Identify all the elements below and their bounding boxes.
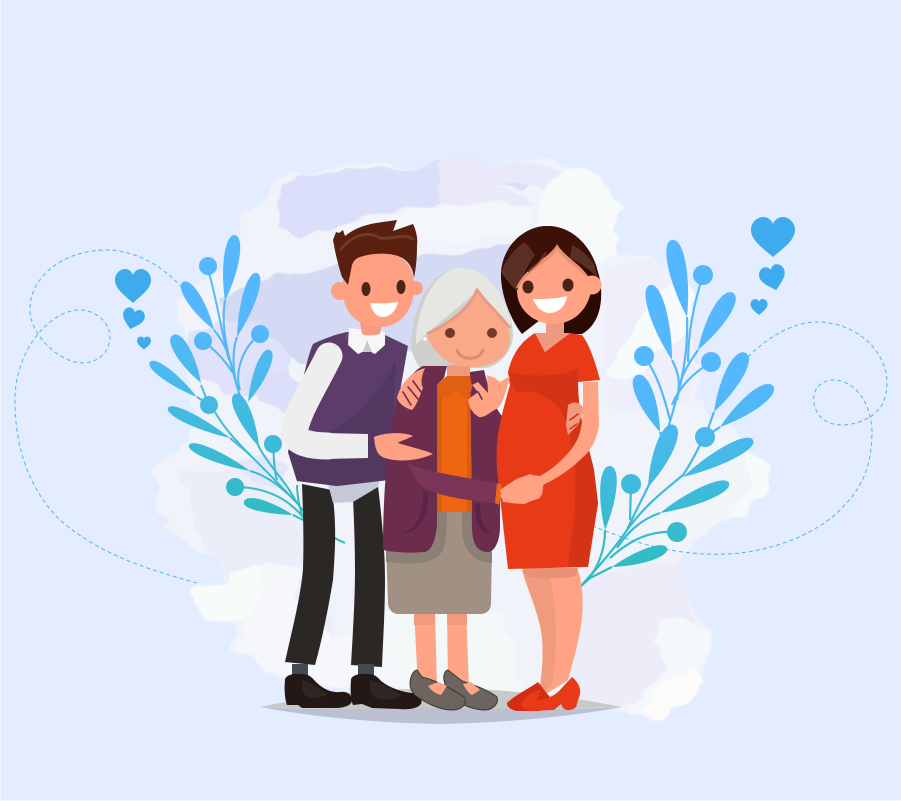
hair	[333, 220, 417, 285]
head	[343, 253, 414, 327]
legs	[414, 610, 469, 687]
socks	[292, 664, 308, 675]
right trouser leg	[351, 486, 385, 667]
leaf	[666, 240, 688, 317]
dress	[497, 333, 600, 569]
smile	[370, 302, 398, 317]
man's hand	[374, 433, 433, 461]
woman: hair and head	[501, 226, 602, 342]
grandmother	[383, 268, 513, 710]
dress shade	[508, 368, 598, 567]
woman's hand on shoulder	[468, 375, 510, 417]
near shoe	[521, 677, 580, 711]
neck	[447, 365, 470, 388]
legs	[522, 570, 583, 700]
cuff	[495, 483, 502, 505]
face	[517, 249, 592, 324]
neckline	[535, 333, 570, 352]
shoes	[285, 674, 352, 708]
smile	[533, 296, 567, 313]
face	[427, 290, 510, 367]
hair strand	[528, 252, 546, 272]
shoes	[444, 670, 497, 710]
dashed loop: left	[15, 250, 197, 583]
leaf	[223, 235, 240, 301]
cardigan	[383, 366, 447, 553]
ears	[331, 282, 349, 300]
ground shadow	[260, 688, 622, 724]
hair	[411, 268, 513, 368]
sleeve	[294, 356, 329, 446]
far hand	[566, 403, 584, 435]
man's hand on shoulder	[397, 368, 425, 410]
skirt	[386, 505, 492, 614]
eyes	[445, 328, 455, 338]
hearts: left	[115, 269, 151, 350]
smile	[457, 350, 483, 358]
hearts: right	[750, 217, 795, 315]
collar	[348, 328, 385, 354]
hand	[500, 474, 544, 504]
woman	[497, 333, 600, 711]
neck	[546, 318, 564, 342]
fringe shadow	[516, 244, 592, 288]
cardigan shadow on skirt	[386, 512, 492, 564]
shirt hem	[328, 478, 380, 503]
left trouser leg	[285, 484, 335, 665]
collar ring	[347, 334, 386, 349]
neck	[360, 322, 382, 336]
sleeve	[407, 463, 497, 503]
plant: right	[580, 240, 774, 587]
ear	[582, 276, 602, 294]
vest	[288, 332, 408, 486]
plant: left	[149, 235, 345, 543]
dashed loop: right	[595, 322, 887, 554]
far shoe	[507, 682, 552, 711]
hair highlights	[501, 242, 598, 292]
grandmother's arm	[407, 463, 544, 505]
blouse	[437, 376, 472, 512]
man	[285, 220, 423, 709]
eyes	[362, 282, 370, 296]
near arm	[500, 382, 599, 504]
earring	[423, 337, 427, 341]
eyes	[522, 280, 534, 294]
hair	[501, 226, 601, 334]
watercolor wash	[154, 160, 774, 716]
